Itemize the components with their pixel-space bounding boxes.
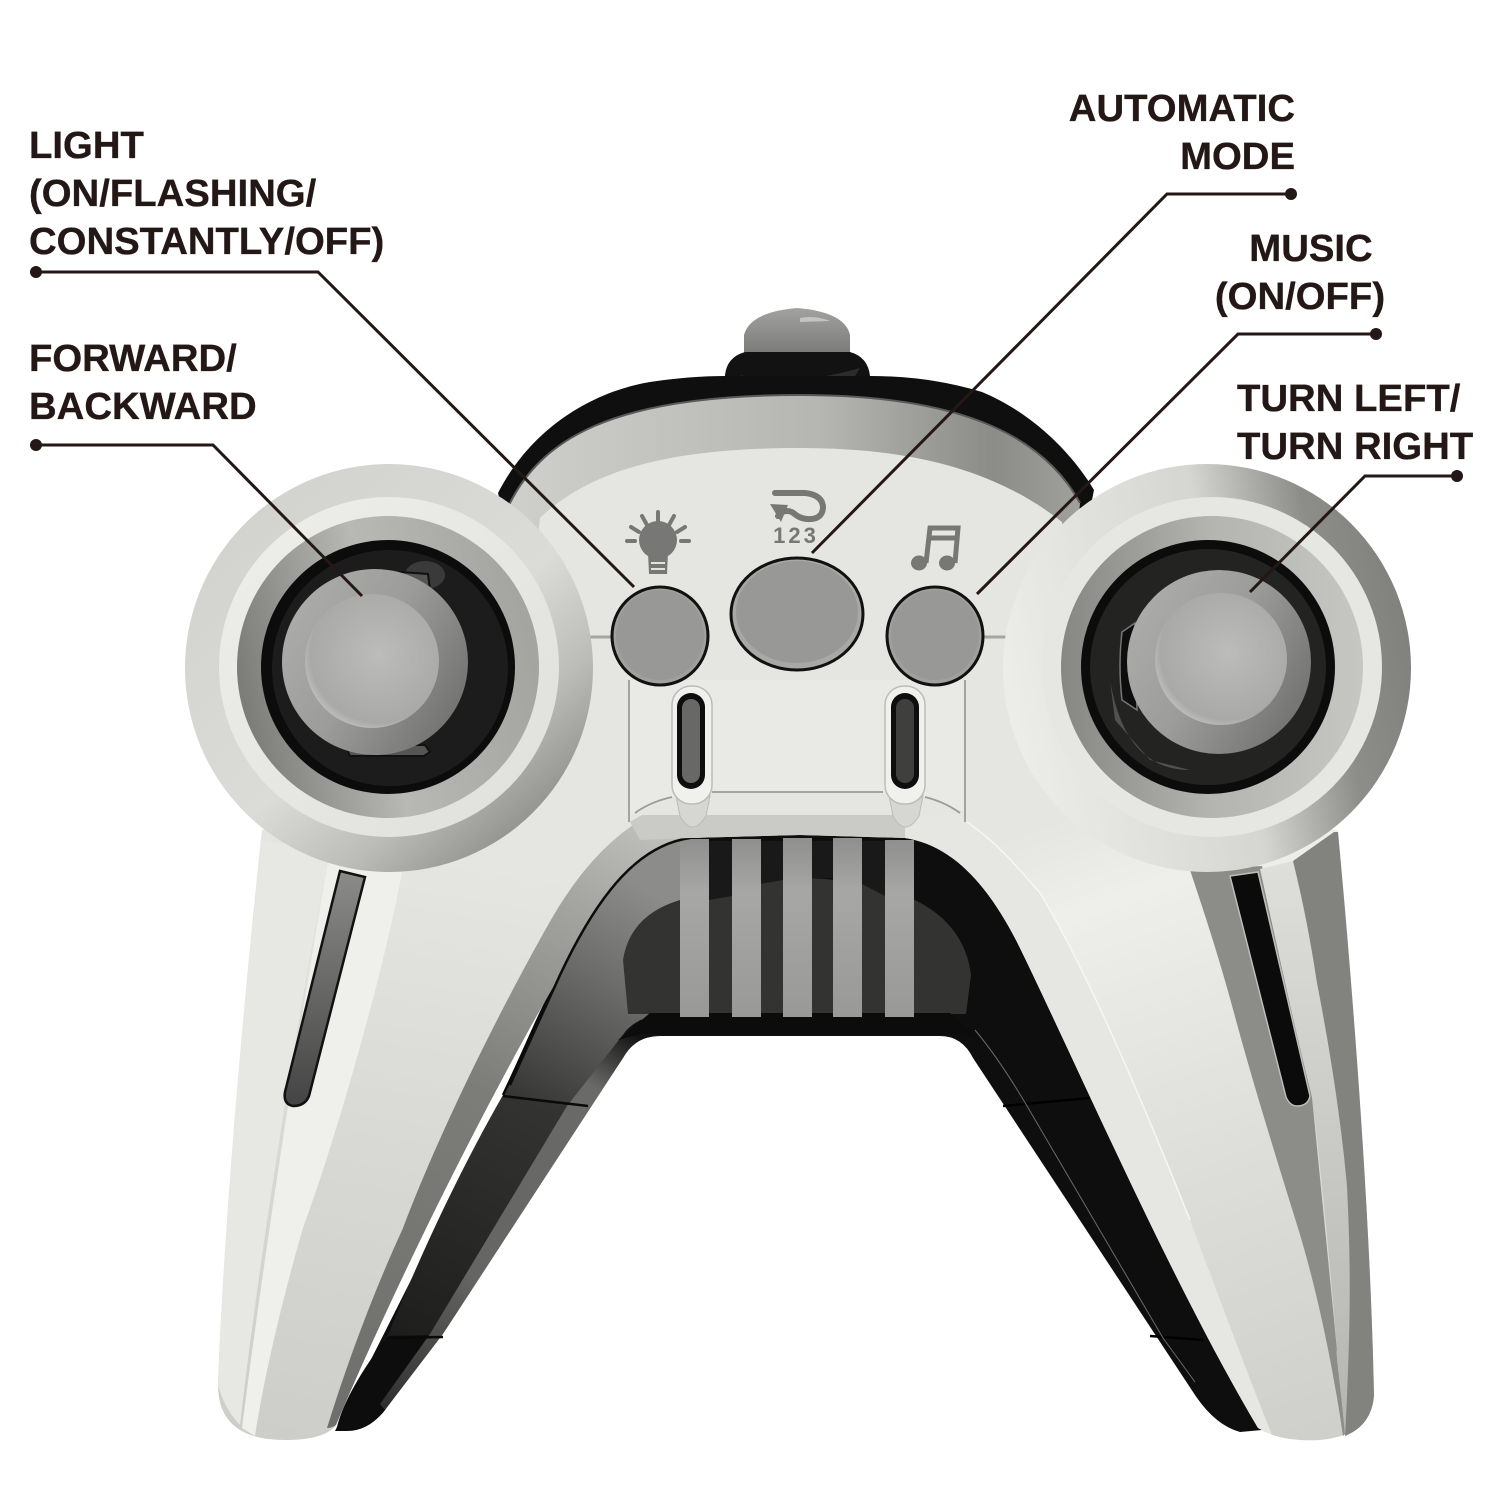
right joystick [1003, 464, 1411, 872]
label: forward/backward: FORWARD/ [29, 337, 237, 380]
band: left grip grey edge [327, 797, 700, 1428]
band: right grip light edge [905, 797, 1272, 1435]
icon: music note [911, 528, 958, 570]
label: forward/backward: BACKWARD [29, 385, 257, 428]
label: automatic mode: MODE [1180, 135, 1295, 178]
centre faceplate [520, 448, 1075, 835]
music button [887, 587, 983, 685]
left leg upper panel [503, 838, 690, 1103]
leader: light [30, 266, 634, 587]
left leg edge strip [380, 1015, 665, 1410]
grill with five ribs [618, 838, 980, 1040]
leader: automatic mode [812, 188, 1297, 553]
controller body and grips [218, 700, 1374, 1440]
right slide switch [885, 686, 925, 827]
left joystick [185, 464, 593, 872]
leader: turn left/right [1250, 470, 1463, 592]
icon: automatic loop [770, 493, 823, 522]
light button [612, 587, 708, 685]
label: turn left/right: TURN LEFT/ [1237, 377, 1460, 420]
antenna knob [725, 308, 870, 386]
leader: forward/backward [30, 439, 362, 596]
band: centre arch [630, 797, 967, 840]
label: light: LIGHT [29, 124, 144, 167]
controller top shell [498, 376, 1094, 560]
leader: music [977, 328, 1382, 594]
label: music: MUSIC [1249, 227, 1373, 270]
label: light: CONSTANTLY/OFF) [29, 220, 384, 263]
automatic mode button [731, 558, 863, 670]
label: turn left/right: TURN RIGHT [1237, 425, 1473, 468]
right grip slot [1230, 872, 1310, 1106]
icon label: 123: 123 [773, 523, 819, 548]
left slide switch [672, 686, 712, 827]
label: automatic mode: AUTOMATIC [1069, 87, 1295, 130]
label: music: (ON/OFF) [1215, 275, 1385, 318]
band: left grip highlight strips [218, 840, 330, 1425]
left grip slot [285, 871, 365, 1106]
left leg lower panel [337, 1095, 570, 1431]
icon: light bulb [627, 512, 689, 574]
controller lower frame and legs [335, 825, 1262, 1432]
label: light: (ON/FLASHING/ [29, 172, 317, 215]
band: right grip grey strips [1190, 866, 1345, 1436]
